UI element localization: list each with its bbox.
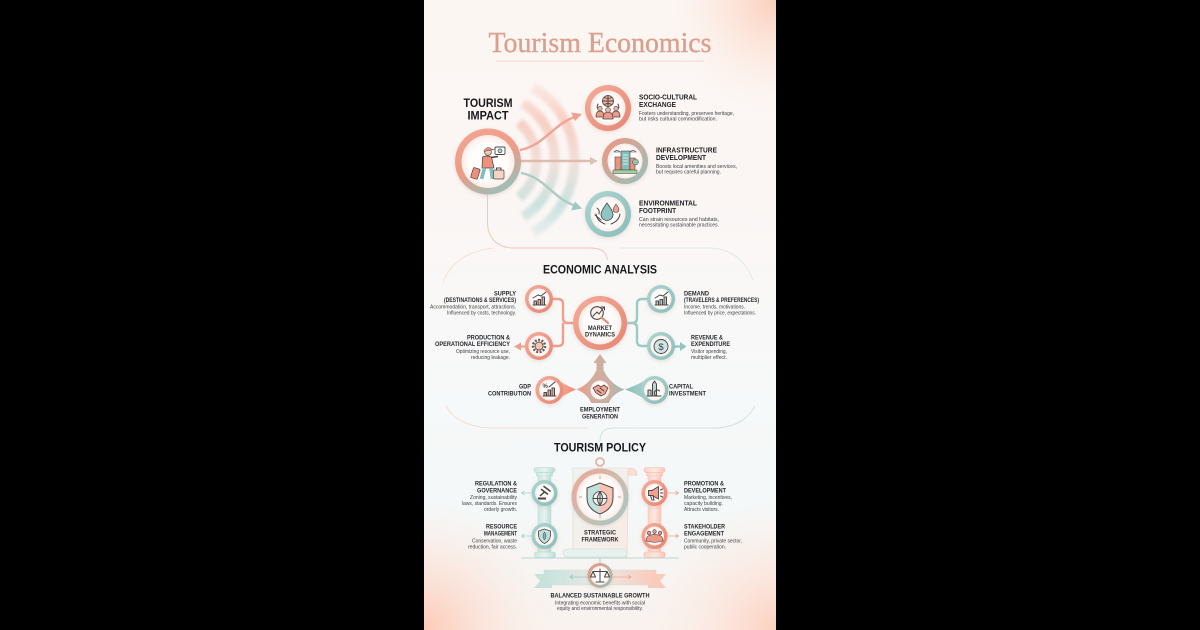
- node: regulation and governance: [532, 480, 558, 506]
- icon: balance scales: [588, 563, 612, 588]
- text: balanced sustainable growth: Integrating economic benefits with social: [555, 600, 645, 606]
- banner: balanced sustainable growth: [534, 558, 666, 588]
- text: promotion and development: Marketing, incentives,: [684, 495, 732, 501]
- text: GDP contribution: CONTRIBUTION: [488, 390, 531, 397]
- text: stakeholder engagement: Community, private sector,: [684, 538, 742, 544]
- text: environmental footprint: Can strain resources and habitats,: [639, 217, 719, 223]
- text: demand: (TRAVELERS & PREFERENCES): [684, 297, 759, 304]
- text: strategic framework: STRATEGIC: [584, 529, 616, 536]
- text: regulation and governance: GOVERNANCE: [477, 487, 518, 494]
- right pillar: [644, 468, 665, 558]
- icon: rising bars: [655, 292, 668, 305]
- text: promotion and development: PROMOTION &: [684, 480, 724, 488]
- panel: tourism policy: [462, 442, 742, 612]
- arrow: regulation: [522, 491, 531, 495]
- icon: water drop in hands: [595, 203, 620, 224]
- node: production: [525, 332, 553, 360]
- text: employment generation: [580, 407, 620, 420]
- panel: economic analysis: [430, 248, 759, 441]
- arrow: production outflow: [514, 342, 526, 350]
- icon: city buildings: [613, 150, 638, 174]
- icon: traveler with luggage: [470, 147, 505, 179]
- heading: tourism impact: TOURISM: [464, 98, 512, 110]
- heading: tourism impact: IMPACT: [468, 110, 508, 122]
- text: supply: SUPPLY: [494, 290, 517, 297]
- text: capital investment: CAPITAL: [669, 383, 693, 390]
- text: production: OPERATIONAL EFFICIENCY: [435, 341, 511, 348]
- text: revenue: REVENUE &: [691, 334, 723, 341]
- icon: megaphone: [648, 486, 663, 500]
- node: stakeholder engagement: [642, 523, 668, 549]
- connectors: right branch: [624, 299, 648, 346]
- text: revenue: [691, 334, 731, 361]
- node: infrastructure development: [602, 138, 648, 184]
- text: socio-cultural exchange: [639, 93, 734, 123]
- text: infrastructure development: [656, 146, 737, 176]
- text: regulation and governance: orderly growth.: [484, 507, 517, 513]
- compass: [572, 458, 628, 526]
- icon: magnifier chart: [591, 307, 608, 323]
- text: production: Optimizing resource use,: [456, 349, 510, 355]
- text: production: [435, 334, 511, 361]
- text: resource management: MANAGEMENT: [484, 530, 517, 537]
- text: infrastructure development: INFRASTRUCTURE: [656, 146, 717, 155]
- arrow: to socio-cultural exchange: [520, 112, 582, 150]
- icon: handshake: [593, 385, 608, 396]
- text: infrastructure development: DEVELOPMENT: [656, 153, 706, 162]
- node: supply: [525, 285, 553, 313]
- icon: percent and bars: %: [542, 384, 548, 390]
- text: promotion and development: [684, 480, 732, 513]
- title: Tourism Economics: [488, 28, 712, 59]
- text: socio-cultural exchange: but risks cultural commodification.: [639, 117, 717, 123]
- text: market dynamics: [585, 325, 616, 338]
- node: employment generation: [587, 377, 613, 403]
- text: stakeholder engagement: STAKEHOLDER: [684, 523, 725, 530]
- text: infrastructure development: but requires careful planning.: [656, 170, 721, 176]
- panel: tourism impact: [455, 85, 737, 260]
- text: GDP contribution: [488, 383, 532, 397]
- text: demand: [684, 290, 759, 316]
- text: stakeholder engagement: public cooperation.: [684, 544, 726, 550]
- text: environmental footprint: FOOTPRINT: [639, 206, 676, 215]
- text: socio-cultural exchange: SOCIO-CULTURAL: [639, 93, 697, 102]
- text: production: PRODUCTION &: [467, 334, 510, 341]
- node: socio-cultural exchange: [585, 85, 631, 131]
- text: regulation and governance: Zoning, sustainability: [470, 495, 517, 501]
- text: resource management: reduction, fair access.: [468, 544, 517, 550]
- icon: leaf shield: [538, 529, 550, 544]
- text: environmental footprint: [639, 199, 719, 229]
- text: stakeholder engagement: [684, 523, 742, 550]
- heading: economic analysis: ECONOMIC ANALYSIS: [543, 264, 657, 276]
- icon: shield with globe: [587, 483, 613, 514]
- node: promotion and development: [642, 480, 668, 506]
- node: demand: [647, 285, 675, 313]
- text: socio-cultural exchange: Fosters understanding, preserves heritage,: [639, 111, 734, 117]
- text: employment generation: EMPLOYMENT: [580, 407, 620, 414]
- node: revenue: [647, 332, 675, 360]
- flow shape: employment arrow into market dynamics: [576, 354, 624, 403]
- scroll: [563, 468, 637, 557]
- section frame: [443, 248, 755, 441]
- text: demand: Income, trends, motivations.: [684, 304, 745, 310]
- flow tail: capital: [625, 376, 652, 404]
- text: balanced sustainable growth: [550, 592, 650, 612]
- text: stakeholder engagement: ENGAGEMENT: [684, 530, 724, 537]
- icon: dollar coin: $: [658, 342, 664, 353]
- scroll and compass: strategic framework: [563, 458, 637, 557]
- node: environmental footprint: [585, 191, 631, 237]
- text: regulation and governance: laws, standards. Ensures: [462, 501, 517, 507]
- arrow: resource: [522, 534, 531, 538]
- text: revenue: EXPENDITURE: [691, 341, 731, 348]
- connectors: left branch: [552, 299, 576, 346]
- radiating arcs: [519, 87, 574, 233]
- text: revenue: multiplier effect.: [691, 355, 727, 361]
- arrow: to infrastructure development: [520, 157, 598, 165]
- main circle: traveler: [455, 128, 521, 194]
- icon: gear: [533, 340, 545, 352]
- node: capital investment: [640, 376, 668, 404]
- text: production: reducing leakage.: [471, 355, 510, 361]
- icon: rising bars: [533, 292, 546, 305]
- text: resource management: [468, 523, 518, 550]
- text: supply: (DESTINATIONS & SERVICES): [444, 297, 516, 304]
- heading: tourism policy: TOURISM POLICY: [554, 442, 646, 454]
- text: balanced sustainable growth: equity and environmental responsibility.: [557, 606, 643, 612]
- text: promotion and development: capacity building.: [684, 501, 723, 507]
- text: resource management: RESOURCE: [486, 523, 518, 530]
- flow tail: GDP: [552, 376, 576, 404]
- text: regulation and governance: REGULATION &: [475, 480, 517, 488]
- icon: building with coin: [647, 381, 661, 396]
- icon: gavel: [538, 486, 550, 500]
- text: demand: DEMAND: [684, 290, 709, 297]
- text: environmental footprint: necessitating sustainable practices.: [639, 223, 719, 229]
- text: promotion and development: DEVELOPMENT: [684, 487, 726, 494]
- text: balanced sustainable growth: BALANCED SUSTAINABLE GROWTH: [550, 592, 650, 599]
- text: capital investment: INVESTMENT: [669, 390, 706, 397]
- node: GDP contribution: [536, 376, 564, 404]
- text: supply: Influenced by costs, technology.: [447, 310, 516, 316]
- text: revenue: Visitor spending,: [691, 349, 727, 355]
- arrow: promotion: [668, 491, 678, 495]
- text: strategic framework: FRAMEWORK: [582, 536, 619, 543]
- arrow: stakeholder: [668, 534, 678, 538]
- node: market dynamics: [573, 296, 627, 350]
- icon: globe and people: [596, 96, 620, 119]
- text: environmental footprint: ENVIRONMENTAL: [639, 199, 697, 208]
- text: employment generation: GENERATION: [582, 413, 618, 420]
- text: supply: Accommodation, transport, attractions.: [430, 304, 516, 310]
- left pillar: [534, 468, 556, 558]
- text: resource management: Conservation, waste: [472, 538, 517, 544]
- node: resource management: [532, 523, 558, 549]
- text: supply: [430, 290, 517, 316]
- text: capital investment: [669, 383, 706, 397]
- text: GDP contribution: GDP: [519, 383, 532, 390]
- text: socio-cultural exchange: EXCHANGE: [639, 100, 676, 109]
- heading: tourism impact: [464, 98, 512, 122]
- text: regulation and governance: [462, 480, 518, 513]
- arrow: revenue outflow: [674, 342, 686, 351]
- text: strategic framework: [582, 529, 619, 543]
- text: market dynamics: DYNAMICS: [585, 331, 616, 338]
- connector to economic analysis: [488, 195, 608, 260]
- text: infrastructure development: Boosts local amenities and services,: [656, 164, 737, 170]
- base line: [521, 558, 679, 559]
- icon: group of people: [646, 530, 663, 542]
- page background: [424, 0, 776, 630]
- text: market dynamics: MARKET: [588, 325, 612, 332]
- text: demand: Influenced by price, expectations.: [684, 310, 756, 316]
- arrow: to environmental footprint: [521, 173, 582, 210]
- text: promotion and development: Attracts visitors.: [684, 507, 719, 513]
